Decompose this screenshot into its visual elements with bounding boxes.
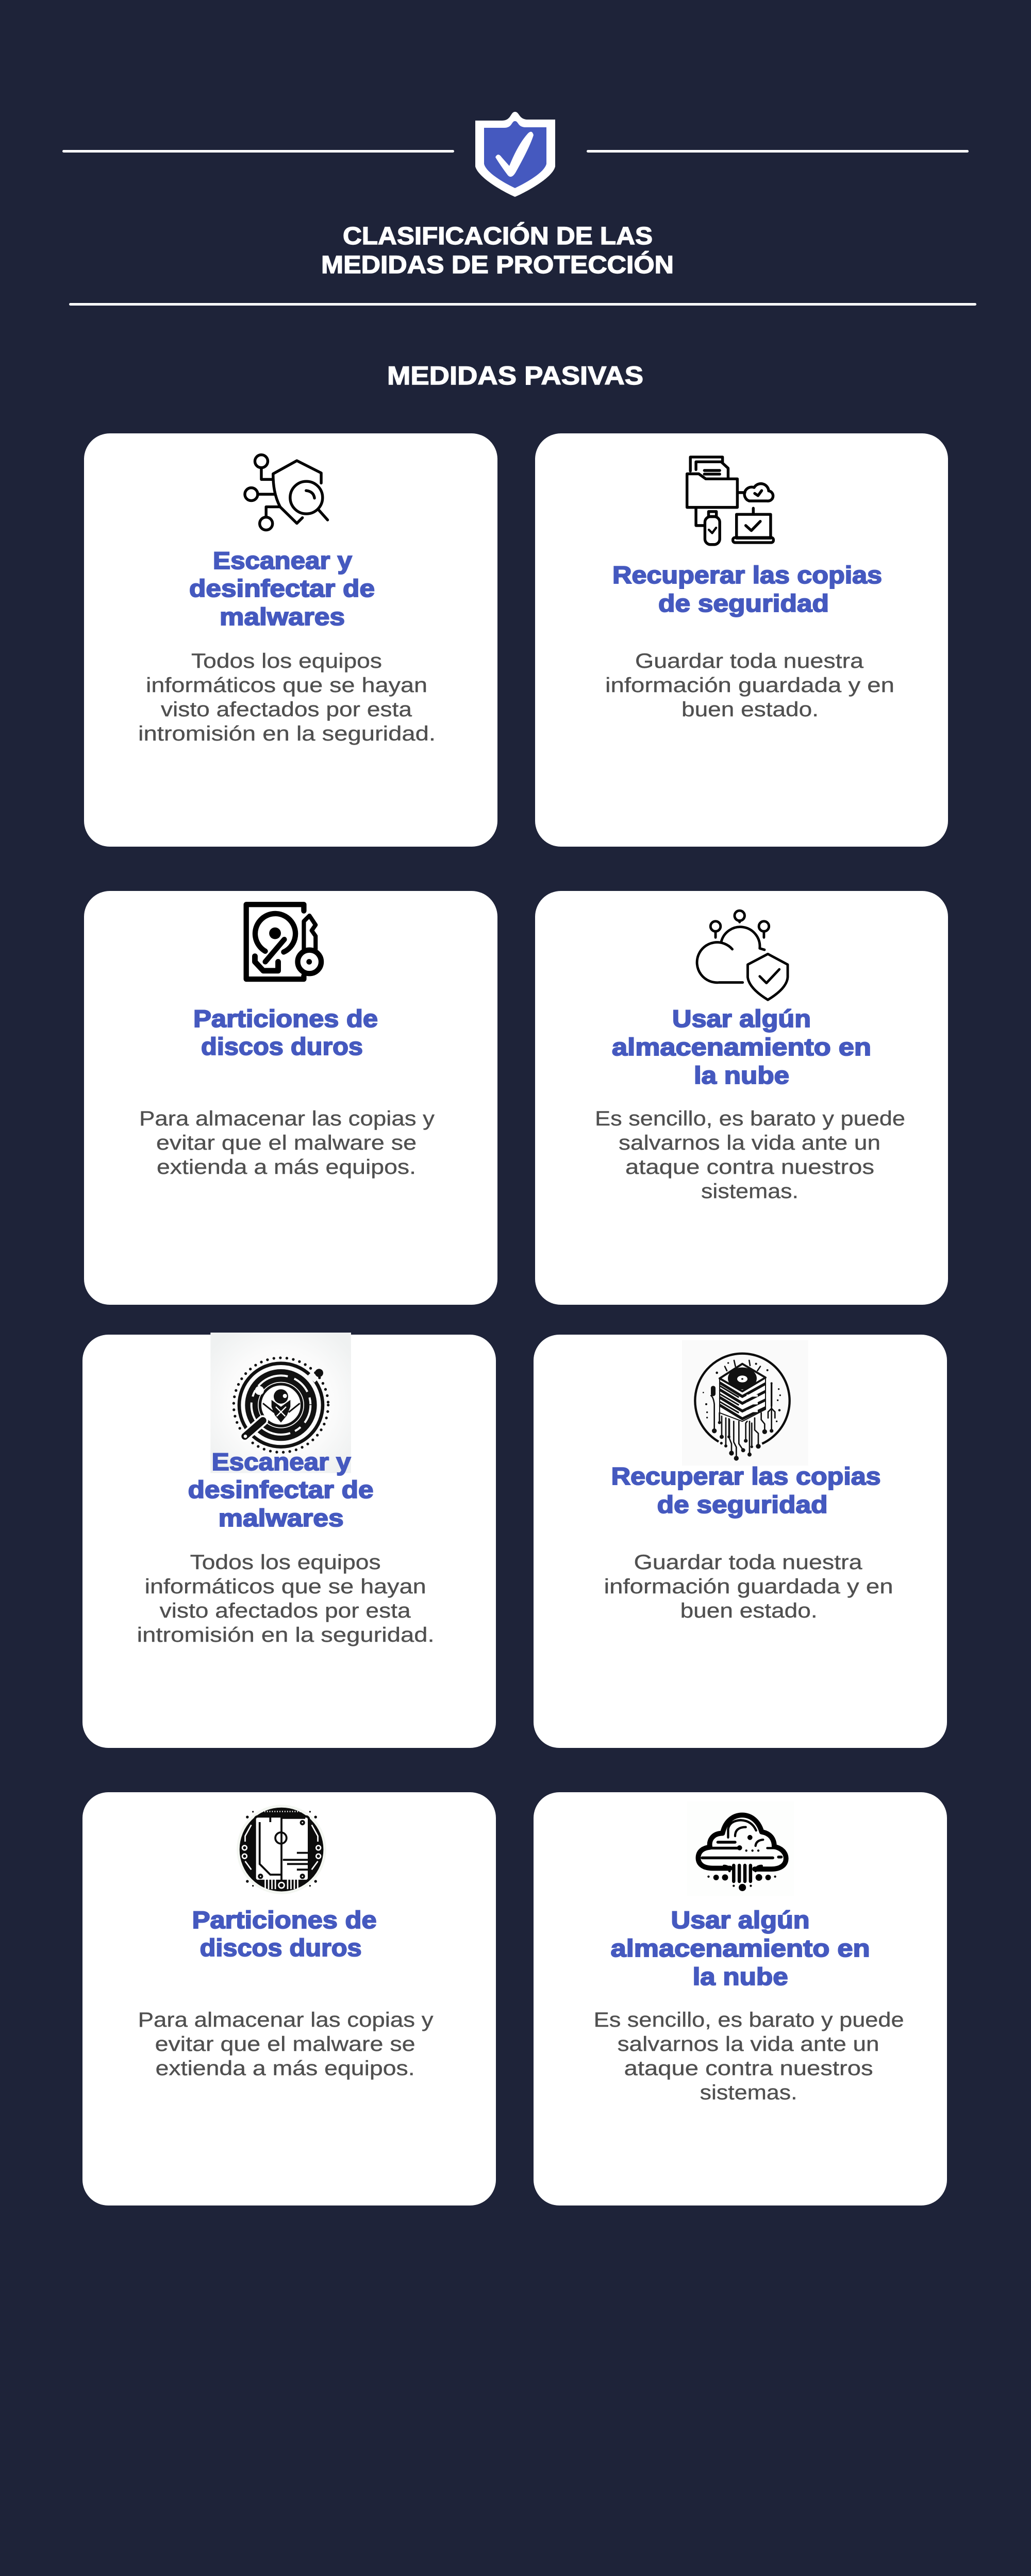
body text: extienda a más equipos.: [157, 1156, 416, 1178]
body text: salvarnos la vida ante un: [618, 2033, 879, 2056]
body text: buen estado.: [680, 1600, 818, 1622]
icon: hard disk with key: [246, 904, 321, 979]
icon: folder backup devices: [687, 457, 773, 545]
body text: intromisión en la seguridad.: [138, 722, 436, 745]
icon: shield scan network: [245, 455, 328, 530]
heading: Particiones de: [193, 1005, 378, 1032]
body text: [138, 650, 436, 745]
heading: [188, 1448, 374, 1531]
panel: recuperar copias (row 3 right): [534, 1335, 947, 1748]
body text: información guardada y en: [604, 1575, 893, 1598]
title: CLASIFICACIÓN DE LAS: [343, 222, 653, 250]
body text: ataque contra nuestros: [624, 2057, 873, 2080]
heading: discos duros: [201, 1033, 363, 1060]
icon: circuit cloud: [687, 1801, 794, 1896]
heading: Recuperar las copias: [611, 1462, 881, 1490]
heading: la nube: [694, 1062, 789, 1089]
heading: Usar algún: [671, 1906, 810, 1933]
title: MEDIDAS DE PROTECCIÓN: [321, 250, 674, 279]
body text: sistemas.: [701, 1180, 799, 1203]
heading: Recuperar las copias: [612, 561, 882, 588]
heading: [611, 1462, 881, 1518]
body text: [138, 2009, 434, 2080]
heading: desinfectar de: [188, 1476, 374, 1503]
body text: Es sencillo, es barato y puede: [595, 1107, 905, 1130]
icon: circuit hard disk emblem: [237, 1805, 326, 1894]
heading: la nube: [693, 1963, 788, 1990]
section heading: medidas pasivas: MEDIDAS PASIVAS: [387, 361, 643, 390]
heading: almacenamiento en: [612, 1033, 871, 1060]
body text: informáticos que se hayan: [146, 674, 427, 697]
body text: salvarnos la vida ante un: [619, 1132, 880, 1154]
body text: sistemas.: [700, 2081, 797, 2104]
icon: shield with check mark: [475, 112, 555, 197]
heading: [612, 1005, 871, 1089]
heading: [192, 1906, 377, 1961]
body text: [137, 1551, 435, 1646]
body text: evitar que el malware se: [155, 2033, 415, 2056]
panel: particiones de discos (row 2 left): [84, 891, 497, 1305]
body text: Guardar toda nuestra: [634, 1551, 862, 1574]
body text: [139, 1107, 435, 1178]
heading: de seguridad: [658, 590, 829, 617]
heading: malwares: [220, 603, 345, 630]
body text: visto afectados por esta: [160, 1600, 411, 1622]
heading: [611, 1906, 870, 1990]
heading: Particiones de: [192, 1906, 377, 1933]
body text: buen estado.: [681, 698, 819, 721]
body text: información guardada y en: [605, 674, 894, 697]
body text: [594, 2009, 904, 2104]
body text: [604, 1551, 893, 1622]
body text: Es sencillo, es barato y puede: [594, 2009, 904, 2031]
body text: Para almacenar las copias y: [138, 2009, 434, 2031]
heading: Usar algún: [672, 1005, 811, 1032]
heading: malwares: [219, 1504, 344, 1531]
body text: Para almacenar las copias y: [139, 1107, 435, 1130]
heading: Escanear y: [212, 1448, 351, 1475]
body text: visto afectados por esta: [161, 698, 412, 721]
icon: server stack with circuits: [682, 1340, 808, 1466]
body text: ataque contra nuestros: [625, 1156, 874, 1178]
body text: Todos los equipos: [191, 650, 382, 672]
heading: [189, 547, 375, 630]
heading: desinfectar de: [189, 575, 375, 602]
panel: recuperar copias (row 1 right): [535, 433, 948, 847]
body text: Todos los equipos: [190, 1551, 381, 1574]
heading: discos duros: [200, 1934, 362, 1961]
body text: [595, 1107, 905, 1203]
panel: escanear y desinfectar (row 3 left): [82, 1333, 496, 1748]
heading: [612, 561, 882, 617]
heading: de seguridad: [657, 1491, 828, 1518]
icon: magnifier over malware emblem: [210, 1333, 351, 1473]
title: [321, 222, 674, 279]
panel: escanear y desinfectar (row 1 left): [84, 433, 497, 847]
icon: cloud with shield: [697, 911, 788, 1000]
panel: almacenamiento en la nube (row 2 right): [535, 891, 948, 1305]
body text: extienda a más equipos.: [156, 2057, 415, 2080]
body text: informáticos que se hayan: [145, 1575, 426, 1598]
panel: particiones de discos (row 4 left): [82, 1792, 496, 2205]
heading: [193, 1005, 378, 1060]
heading: almacenamiento en: [611, 1934, 870, 1962]
heading: Escanear y: [213, 547, 352, 574]
body text: evitar que el malware se: [156, 1132, 417, 1154]
panel: almacenamiento en la nube (row 4 right): [534, 1792, 947, 2205]
body text: Guardar toda nuestra: [635, 650, 864, 672]
body text: intromisión en la seguridad.: [137, 1624, 435, 1646]
body text: [605, 650, 894, 721]
